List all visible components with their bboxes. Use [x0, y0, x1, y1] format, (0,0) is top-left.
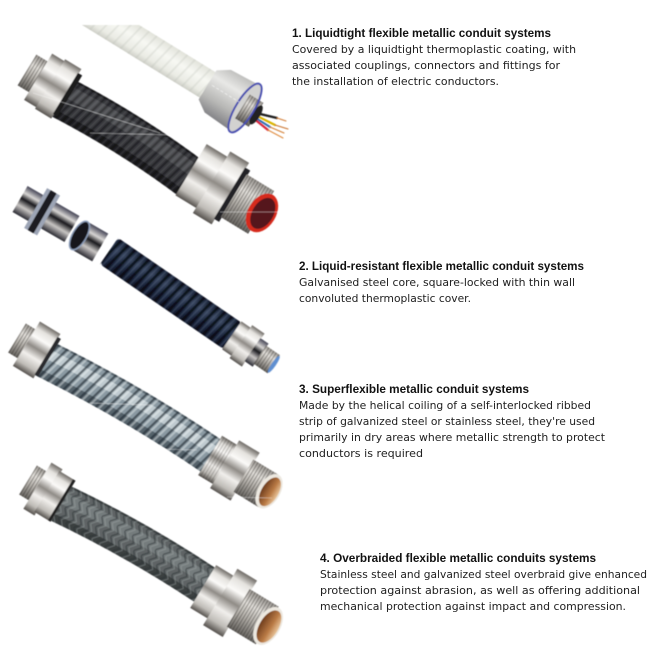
conduit 2: compression ring [65, 218, 108, 261]
text block 3 [299, 382, 605, 460]
braided tube [60, 498, 208, 585]
text block 1 [292, 26, 576, 88]
description 1 [292, 44, 576, 88]
text block 4 [320, 551, 647, 613]
heading 1: 1. Liquidtight flexible metallic conduit systems [292, 26, 551, 40]
description 1: associated couplings, connectors and fittings for [292, 60, 561, 72]
description 4 [320, 569, 647, 613]
silver connector with blue ring [193, 61, 274, 141]
description 2 [299, 277, 575, 305]
description 4: mechanical protection against impact and compression. [320, 601, 626, 613]
conduit 1: black liquidtight conduit with nickel fittings [8, 39, 293, 251]
description 3: conductors is required [299, 448, 423, 460]
description 3 [299, 400, 605, 460]
description 2: Galvanised steel core, square-locked with thin wall [299, 277, 575, 289]
heading 3: 3. Superflexible metallic conduit systems [299, 382, 529, 396]
colored electric wires [253, 113, 288, 138]
description 4: Stainless steel and galvanized steel overbraid give enhanced [320, 569, 647, 581]
description 3: Made by the helical coiling of a self-interlocked ribbed [299, 400, 591, 412]
conduit 3: superflexible galvanized steel conduit [2, 314, 293, 521]
description 2: convoluted thermoplastic cover. [299, 293, 471, 305]
description 3: strip of galvanized steel or stainless steel, they're used [299, 416, 595, 428]
description 4: protection against abrasion, as well as offering additional [320, 585, 640, 597]
braided conduit fittings [11, 452, 296, 660]
fittings [8, 39, 293, 251]
steel conduit fittings [2, 314, 293, 521]
conduit 2: dark blue convoluted conduit with end fitting [98, 235, 287, 382]
description 3: primarily in dry areas where metallic strength to protect [299, 432, 605, 444]
white conduit tube [82, 24, 216, 98]
heading 2: 2. Liquid-resistant flexible metallic conduit systems [299, 259, 584, 273]
conduit 2: exploded fitting body [9, 179, 83, 249]
description 1: Covered by a liquidtight thermoplastic coating, with [292, 44, 576, 56]
conduit 1: white liquidtight conduit with fitting and wires [82, 24, 290, 140]
description 1: the installation of electric conductors. [292, 76, 499, 88]
conduit 4: overbraided conduit with nickel fittings [11, 452, 296, 660]
text block 2 [299, 259, 584, 305]
black conduit tube [57, 88, 197, 180]
heading 4: 4. Overbraided flexible metallic conduits systems [320, 551, 596, 565]
steel ribbed tube [43, 353, 216, 457]
